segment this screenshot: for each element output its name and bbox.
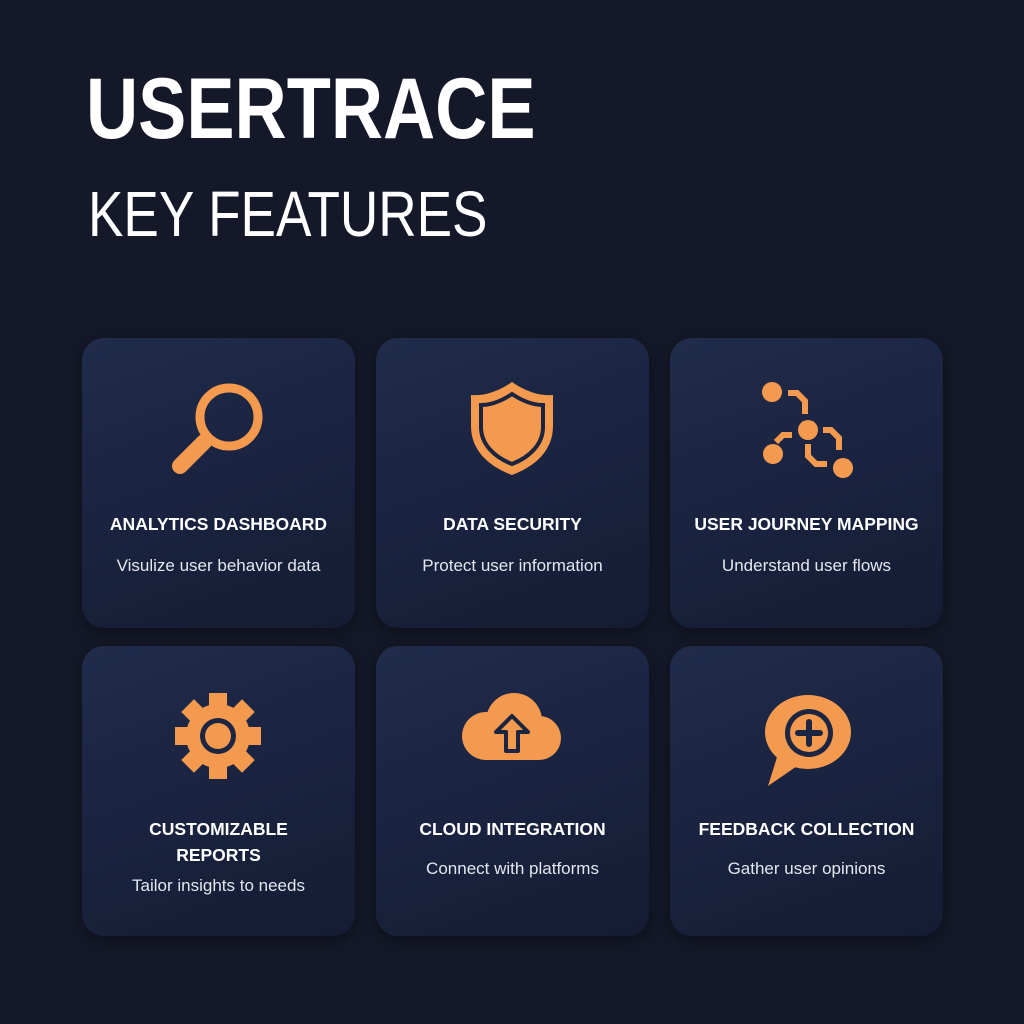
panel: analytics dashboard bbox=[82, 338, 355, 628]
heading: USER JOURNEY MAPPING bbox=[694, 514, 919, 534]
panel: data security bbox=[376, 338, 649, 628]
heading bbox=[149, 819, 288, 865]
title: USERTRACE bbox=[86, 61, 536, 157]
heading: FEEDBACK COLLECTION bbox=[699, 819, 914, 839]
heading: REPORTS bbox=[176, 845, 261, 865]
heading: CLOUD INTEGRATION bbox=[419, 819, 606, 839]
heading: CUSTOMIZABLE bbox=[149, 819, 288, 839]
panel: feedback collection bbox=[670, 646, 943, 936]
icon: magnifier bbox=[172, 384, 262, 474]
panel: customizable reports bbox=[82, 646, 355, 936]
icon: journey nodes bbox=[762, 382, 853, 478]
icon: cloud upload bbox=[462, 693, 561, 760]
subtitle: KEY FEATURES bbox=[88, 178, 487, 250]
heading: ANALYTICS DASHBOARD bbox=[110, 514, 327, 534]
text: Gather user opinions bbox=[728, 859, 885, 878]
panel: user journey mapping bbox=[670, 338, 943, 628]
icon: speech bubble plus bbox=[765, 695, 851, 786]
icon: shield bbox=[471, 382, 553, 475]
text: Understand user flows bbox=[722, 556, 891, 575]
text: Visulize user behavior data bbox=[117, 556, 320, 575]
icon: gear bbox=[175, 693, 261, 779]
panel: cloud integration bbox=[376, 646, 649, 936]
text: Protect user information bbox=[422, 556, 603, 575]
text: Tailor insights to needs bbox=[132, 876, 305, 895]
heading: DATA SECURITY bbox=[443, 514, 582, 534]
text: Connect with platforms bbox=[426, 859, 599, 878]
